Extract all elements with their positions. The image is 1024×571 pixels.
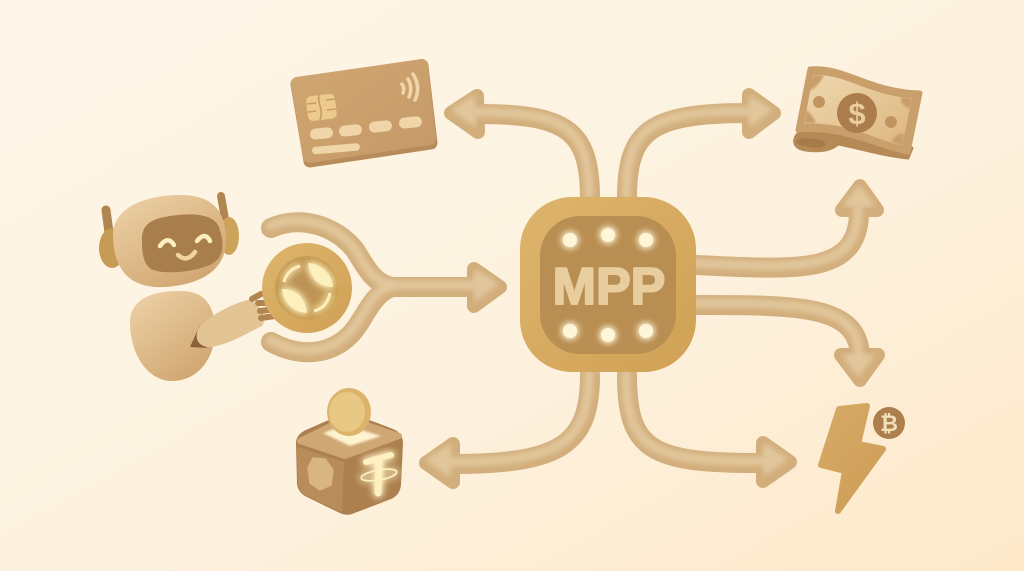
robot arm and hand [190,294,276,348]
arrow: MPP to banknote [626,95,774,198]
card number dashes [309,116,422,155]
chip label: MPP [553,258,665,316]
robot body [130,291,215,381]
arrow: MPP to card [451,96,590,198]
bitcoin badge: ₿ [880,411,898,436]
icon: tether cube [297,388,402,514]
arrow: MPP up-right [696,186,877,268]
coin glow mark [282,263,333,313]
arrow: MPP down-right [696,303,878,380]
robot face [160,236,210,258]
cube slot glow [323,425,381,446]
MPP chip [520,197,696,372]
tether mark [360,455,398,493]
banknote dollar medallion: $ [848,96,866,131]
chip lights [563,228,653,342]
robot head [113,195,226,287]
hexagon mark [308,458,333,490]
arrow: MPP to lightning [626,373,790,481]
contactless symbol [402,74,418,100]
icon: robot [99,195,276,381]
robot antennas and ears [99,196,239,268]
chip frame [520,197,696,372]
card chip [306,93,337,122]
banknote corners [804,75,912,146]
icon: banknote [795,69,920,158]
icon: credit card [297,65,431,161]
icon: glowing coin [262,243,352,333]
icon: lightning bolt [821,406,905,511]
arrow: merging input into MPP [270,220,500,352]
coin in slot [327,388,371,436]
arrow: MPP to cube [426,373,590,482]
chip inner panel [540,216,676,354]
